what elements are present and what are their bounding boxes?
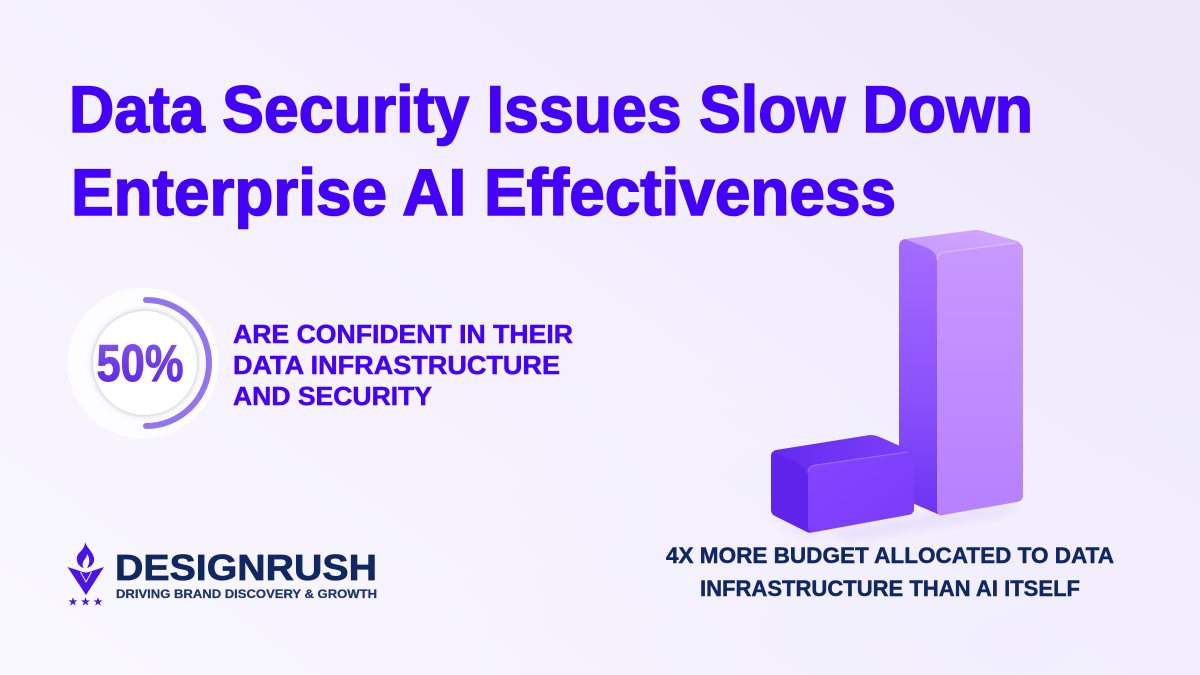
tall bar left side [899, 239, 945, 516]
ring value: 50% [96, 335, 184, 393]
stat text: DATA INFRASTRUCTURE [233, 350, 560, 380]
small bar [771, 435, 914, 533]
tall bar top [905, 230, 1023, 258]
stars: ★ [69, 597, 78, 608]
small bar left side [771, 451, 815, 533]
tall bar [899, 230, 1023, 516]
ring outer disc [68, 288, 218, 438]
logo wordmark: DESIGNRUSH [115, 547, 377, 588]
chevron [68, 567, 104, 595]
ring progress arc [146, 300, 209, 426]
3D bar chart [768, 230, 1023, 540]
stat text [233, 319, 573, 411]
small bar front [808, 452, 914, 532]
chart caption: INFRASTRUCTURE THAN AI ITSELF [700, 576, 1080, 601]
chart caption [666, 543, 1114, 601]
title [69, 72, 1033, 229]
tall bar front [937, 243, 1023, 515]
DesignRush logo [68, 542, 377, 608]
logo tagline: DRIVING BRAND DISCOVERY & GROWTH [116, 587, 377, 601]
stat text: ARE CONFIDENT IN THEIR [233, 319, 573, 349]
stat ring: 50% [68, 288, 218, 438]
title: Enterprise AI Effectiveness [71, 155, 896, 229]
ring inner disc [93, 311, 197, 415]
logo icon: ★ [81, 597, 90, 608]
logo icon: ★ [94, 597, 103, 608]
flame [77, 542, 94, 568]
small bar rim highlight [808, 452, 908, 473]
tall bar rim highlight [937, 243, 1016, 260]
logo icon [68, 542, 104, 608]
chevron inner line [80, 572, 92, 582]
chart caption: 4X MORE BUDGET ALLOCATED TO DATA [666, 543, 1114, 568]
ground shadow [768, 504, 1022, 540]
small bar top [773, 435, 914, 472]
title: Data Security Issues Slow Down [69, 72, 1033, 146]
stat text: AND SECURITY [233, 381, 432, 411]
